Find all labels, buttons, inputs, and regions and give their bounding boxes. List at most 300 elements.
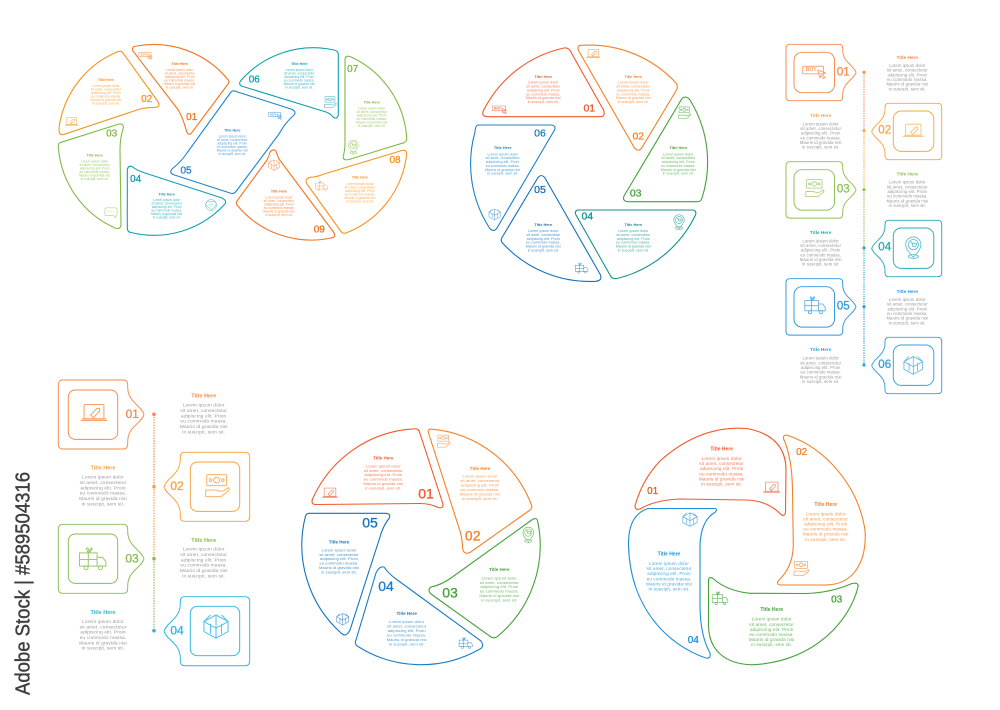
segment 06 [240, 48, 338, 118]
segment 03: 03 [442, 584, 458, 600]
step 06: Mauris id gravida nisi [800, 374, 842, 379]
segment 03: adipiscing elit. Proin [662, 160, 695, 164]
segment 01: Lorem ipsum dolor [702, 456, 742, 460]
segment 07: eu commodo massa. [356, 117, 387, 121]
step 01: eu commodo massa. [180, 418, 227, 424]
step 02: in suscipit, sem sit. [82, 501, 124, 507]
chart: nine-segment double circle [58, 45, 407, 240]
step 04: Mauris id gravida nisi [800, 256, 842, 261]
step 03: 03 [125, 551, 139, 565]
segment 04: 04 [130, 174, 142, 185]
segment 05: in suscipit, sem sit. [321, 569, 357, 574]
step 03: in suscipit, sem sit. [889, 203, 926, 208]
step 02: sit amet, consectetur [80, 480, 127, 486]
step 03: eu commodo massa. [180, 562, 227, 568]
segment 02: sit amet, consectetur [616, 85, 651, 89]
step 04: sit amet, consectetur [800, 242, 842, 247]
stock id caption: Adobe Stock | #589504316 [12, 472, 34, 695]
segment 01: BUY [141, 52, 147, 56]
segment 04: Mauris id gravida nisi [616, 245, 651, 249]
segment 03: eu commodo massa. [480, 588, 519, 593]
segment 02: 02 [632, 131, 644, 143]
segment 01: adipiscing elit. Proin [165, 75, 195, 79]
step 01: sit amet, consectetur [887, 67, 928, 72]
step 04: sit amet, consectetur [80, 624, 127, 630]
segment 02: adipiscing elit. Proin [91, 91, 121, 95]
segment 01: eu commodo massa. [164, 78, 195, 82]
step 06 [800, 337, 942, 394]
segment 09: eu commodo massa. [264, 206, 294, 210]
step 05: in suscipit, sem sit. [889, 320, 926, 325]
segment 06: 06 [534, 127, 546, 139]
timeline dotted spine [862, 71, 866, 367]
segment 01: sit amet, consectetur [526, 85, 561, 89]
segment 04: Title Here [159, 192, 175, 196]
step 04: adipiscing elit. Proin [801, 247, 841, 252]
segment 02: in suscipit, sem sit. [618, 100, 649, 104]
segment 06 [471, 125, 555, 230]
segment 07: Lorem ipsum dolor [358, 106, 385, 110]
segment 02: Mauris id gravida nisi [460, 491, 500, 496]
segment 03: in suscipit, sem sit. [751, 642, 792, 647]
segment 03: Title Here [760, 607, 783, 613]
step 02: sit amet, consectetur [800, 125, 842, 130]
step 01: Mauris id gravida nisi [886, 81, 928, 86]
segment 02: Title Here [98, 78, 114, 82]
segment 01 [312, 429, 443, 508]
step 03: adipiscing elit. Proin [181, 557, 227, 563]
segment 02 [778, 435, 865, 585]
segment 02: Title Here [470, 466, 491, 471]
segment 03: in suscipit, sem sit. [481, 597, 517, 602]
segment 03 [624, 97, 708, 202]
segment 02: sit amet, consectetur [91, 87, 121, 91]
segment 03 [58, 124, 123, 228]
segment 03: sit amet, consectetur [480, 579, 519, 584]
segment 05 [171, 91, 295, 194]
step 05: Mauris id gravida nisi [886, 315, 928, 320]
segment 02: Title Here [814, 502, 837, 508]
step 02: adipiscing elit. Proin [80, 485, 126, 491]
segment 02: in suscipit, sem sit. [805, 536, 846, 541]
segment 05: in suscipit, sem sit. [218, 152, 246, 156]
segment 05: 05 [180, 166, 192, 176]
segment 08: sit amet, consectetur [345, 185, 375, 189]
step 06: adipiscing elit. Proin [801, 365, 841, 370]
step 01: in suscipit, sem sit. [182, 429, 225, 435]
step 01: 01 [126, 407, 139, 421]
step 03: sit amet, consectetur [180, 552, 227, 558]
segment 03: in suscipit, sem sit. [81, 177, 109, 181]
chart: four-segment pinwheel circle [628, 428, 865, 665]
step 01: Lorem ipsum dolor [889, 62, 926, 68]
segment 05: 05 [534, 184, 546, 196]
segment 01: adipiscing elit. Proin [364, 472, 402, 477]
segment 04: in suscipit, sem sit. [153, 215, 181, 219]
segment 01: in suscipit, sem sit. [701, 481, 742, 486]
step 04: Mauris id gravida nisi [79, 640, 127, 646]
step 03: 03 [837, 183, 850, 195]
segment 09 [236, 150, 335, 240]
segment 02: Lorem ipsum dolor [806, 511, 846, 516]
segment 07 [343, 56, 407, 160]
segment 03: adipiscing elit. Proin [750, 626, 794, 631]
segment 06: sit amet, consectetur [284, 71, 315, 75]
segment 08: Lorem ipsum dolor [346, 182, 374, 186]
segment 04: Title Here [396, 611, 417, 616]
step 04: eu commodo massa. [80, 634, 126, 640]
step 01 [786, 44, 928, 101]
segment 05: Mauris id gravida nisi [319, 565, 359, 570]
segment 02: eu commodo massa. [616, 92, 650, 96]
segment 09: Title Here [271, 189, 287, 193]
step 05: adipiscing elit. Proin [888, 306, 928, 311]
segment 08 [306, 150, 407, 233]
segment 02: Lorem ipsum dolor [618, 81, 649, 85]
segment 01: 01 [186, 112, 198, 123]
segment 02: Mauris id gravida nisi [803, 531, 849, 536]
step 02: in suscipit, sem sit. [802, 144, 839, 149]
segment 03: Lorem ipsum dolor [752, 616, 792, 621]
segment 01: 01 [583, 103, 595, 115]
step 04 [800, 220, 942, 277]
segment 05: 05 [362, 514, 378, 530]
segment 03: 03 [630, 187, 642, 199]
segment 03: eu commodo massa. [79, 170, 110, 174]
segment 02: eu commodo massa. [91, 94, 121, 98]
segment 03: Lorem ipsum dolor [663, 152, 694, 156]
step 02: eu commodo massa. [800, 135, 841, 140]
segment 05: adipiscing elit. Proin [320, 556, 358, 561]
step 04: in suscipit, sem sit. [82, 645, 124, 651]
segment 03: Title Here [489, 567, 510, 572]
segment 01: Mauris id gravida nisi [526, 96, 561, 100]
segment 03: 03 [106, 128, 118, 140]
segment 02 [428, 429, 532, 553]
segment 05 [501, 176, 601, 281]
segment 02: adipiscing elit. Proin [461, 482, 499, 487]
step 02: 02 [878, 125, 891, 137]
segment 05: in suscipit, sem sit. [528, 248, 559, 252]
segment 02 [59, 51, 159, 135]
step 01: Lorem ipsum dolor [183, 402, 225, 408]
step 05: 05 [837, 300, 850, 312]
segment 04: Title Here [624, 222, 643, 227]
step 05: eu commodo massa. [887, 310, 928, 315]
segment 01 [132, 45, 229, 134]
segment 03: Lorem ipsum dolor [482, 575, 517, 580]
segment 04: in suscipit, sem sit. [649, 586, 689, 591]
chart: six-segment circle [471, 45, 708, 281]
step 05: Lorem ipsum dolor [889, 296, 926, 302]
chart: four-step vertical timeline [58, 380, 250, 666]
step 02: Mauris id gravida nisi [800, 139, 842, 144]
segment 03: Title Here [87, 153, 103, 157]
segment 01 [483, 48, 604, 117]
segment 06: Lorem ipsum dolor [487, 152, 519, 156]
segment 07: Mauris id gravida nisi [356, 120, 388, 124]
segment 05: BUY [270, 112, 277, 116]
segment 06: eu commodo massa. [284, 78, 315, 82]
segment 06: Title Here [291, 62, 307, 66]
step 02: Lorem ipsum dolor [802, 121, 839, 126]
step 04: Lorem ipsum dolor [82, 618, 124, 624]
step 06: 06 [878, 359, 891, 371]
step 03: Lorem ipsum dolor [889, 179, 926, 184]
segment 06: Lorem ipsum dolor [286, 68, 313, 72]
segment 01 [635, 428, 786, 515]
segment 02: sit amet, consectetur [460, 478, 500, 483]
segment 02: Mauris id gravida nisi [90, 98, 122, 102]
step 05: sit amet, consectetur [887, 301, 928, 306]
segment 09: Lorem ipsum dolor [265, 195, 293, 199]
segment 05: sit amet, consectetur [217, 138, 248, 142]
segment 06: Title Here [494, 145, 512, 150]
segment 01: Lorem ipsum dolor [366, 463, 401, 468]
segment 03: in suscipit, sem sit. [663, 172, 694, 176]
segment 02: adipiscing elit. Proin [804, 521, 848, 526]
segment 04: 04 [581, 211, 593, 223]
segment 04: Lorem ipsum dolor [649, 560, 689, 566]
segment 01: Title Here [534, 74, 553, 79]
step 01: BUY [806, 67, 817, 73]
segment 01: Mauris id gravida nisi [699, 476, 745, 481]
segment 03: Mauris id gravida nisi [661, 168, 696, 172]
segment 03: adipiscing elit. Proin [480, 584, 518, 589]
segment 03: sit amet, consectetur [661, 156, 696, 160]
segment 04: adipiscing elit. Proin [617, 237, 650, 241]
segment 02: Lorem ipsum dolor [92, 84, 120, 88]
segment 01: eu commodo massa. [364, 476, 403, 481]
segment 01: 01 [647, 486, 659, 497]
segment 04: sit amet, consectetur [151, 201, 182, 205]
chart: five-segment circle [302, 429, 540, 665]
segment 02: eu commodo massa. [803, 526, 848, 531]
segment 04: eu commodo massa. [616, 241, 650, 245]
segment 06: adipiscing elit. Proin [284, 75, 314, 79]
step 04: eu commodo massa. [800, 252, 841, 257]
segment 06: in suscipit, sem sit. [285, 85, 313, 89]
segment 04 [355, 567, 483, 665]
segment 04: sit amet, consectetur [387, 623, 427, 628]
segment 07: adipiscing elit. Proin [357, 113, 387, 117]
segment 05: Mauris id gravida nisi [526, 245, 561, 249]
step 02: Title Here [810, 113, 832, 118]
segment 03: sit amet, consectetur [749, 621, 794, 626]
segment 06: sit amet, consectetur [486, 156, 521, 160]
step 03: Mauris id gravida nisi [180, 568, 228, 574]
segment 03 [429, 519, 540, 638]
segment 04: eu commodo massa. [387, 632, 426, 637]
step 02: adipiscing elit. Proin [801, 130, 841, 135]
step 03: in suscipit, sem sit. [182, 573, 225, 579]
segment 05: eu commodo massa. [526, 241, 560, 245]
segment 04: in suscipit, sem sit. [618, 248, 649, 252]
segment 05: Title Here [329, 540, 350, 544]
segment 04: 04 [378, 578, 394, 594]
segment 04: adipiscing elit. Proin [388, 627, 426, 632]
segment 07: in suscipit, sem sit. [358, 124, 386, 128]
segment 05: Lorem ipsum dolor [322, 547, 357, 552]
step 02: eu commodo massa. [80, 490, 126, 496]
segment 07: Title Here [364, 100, 380, 104]
step 05 [786, 279, 928, 335]
segment 01: eu commodo massa. [526, 92, 560, 96]
segment 09: adipiscing elit. Proin [264, 202, 294, 206]
segment 09: Mauris id gravida nisi [263, 209, 295, 213]
step 01: adipiscing elit. Proin [888, 72, 928, 77]
step 01: in suscipit, sem sit. [889, 86, 926, 91]
segment 02 [578, 45, 677, 150]
segment 05: eu commodo massa. [217, 145, 248, 149]
segment 05 [302, 513, 390, 635]
step 04 [79, 597, 250, 666]
step 04: Lorem ipsum dolor [802, 238, 839, 243]
step 02: 02 [170, 479, 184, 493]
step 01: adipiscing elit. Proin [181, 413, 227, 419]
segment 02: sit amet, consectetur [803, 516, 848, 521]
segment 02: in suscipit, sem sit. [462, 496, 498, 501]
segment 07: 07 [347, 64, 359, 75]
segment 02: adipiscing elit. Proin [617, 88, 650, 92]
segment 01: Title Here [710, 446, 733, 452]
segment 02: 02 [141, 94, 153, 105]
step 03: adipiscing elit. Proin [888, 189, 928, 194]
segment 05: Lorem ipsum dolor [528, 229, 559, 233]
segment 01: adipiscing elit. Proin [700, 466, 744, 471]
segment 04: eu commodo massa. [151, 208, 182, 212]
segment 01: Title Here [172, 62, 188, 66]
segment 05: adipiscing elit. Proin [217, 142, 247, 146]
step 02: Lorem ipsum dolor [82, 474, 124, 480]
segment 04: Lorem ipsum dolor [618, 229, 649, 233]
segment 06: eu commodo massa. [486, 164, 520, 168]
step 04: 04 [878, 242, 892, 254]
step 03: Title Here [897, 172, 918, 176]
segment 01: eu commodo massa. [699, 471, 744, 476]
segment 06: in suscipit, sem sit. [487, 172, 518, 176]
step 02: Mauris id gravida nisi [79, 496, 127, 502]
segment 08: adipiscing elit. Proin [345, 189, 375, 193]
step 01: eu commodo massa. [887, 76, 928, 81]
segment 03: Title Here [669, 145, 688, 150]
segment 02: eu commodo massa. [460, 487, 500, 492]
segment 04: Lorem ipsum dolor [153, 198, 180, 202]
segment 04: adipiscing elit. Proin [647, 571, 691, 576]
step 05: Title Here [897, 289, 918, 294]
step 03: Title Here [191, 538, 216, 544]
segment 04 [575, 210, 696, 279]
segment 02: Mauris id gravida nisi [616, 96, 651, 100]
segment 04 [628, 508, 716, 658]
step 04: Title Here [91, 610, 115, 616]
segment 02: Lorem ipsum dolor [463, 473, 498, 478]
step 04: in suscipit, sem sit. [802, 261, 839, 266]
segment 01: Mauris id gravida nisi [363, 481, 403, 486]
segment 09: 09 [314, 224, 325, 236]
segment 02: Title Here [624, 74, 643, 79]
segment 03: eu commodo massa. [749, 632, 794, 637]
segment 03: 03 [831, 594, 843, 606]
segment 04: Title Here [658, 551, 681, 557]
step 03: Lorem ipsum dolor [183, 546, 225, 552]
segment 01: adipiscing elit. Proin [527, 88, 560, 92]
step 03: sit amet, consectetur [887, 184, 928, 189]
segment 04: Lorem ipsum dolor [389, 618, 425, 624]
segment 06: adipiscing elit. Proin [486, 160, 519, 164]
segment 04: 04 [688, 635, 699, 646]
segment 08: Mauris id gravida nisi [344, 196, 376, 200]
segment 08: Title Here [352, 176, 368, 180]
segment 01: sit amet, consectetur [699, 461, 744, 466]
segment 01: sit amet, consectetur [364, 467, 403, 472]
segment 01: Lorem ipsum dolor [528, 81, 559, 85]
segment 05: Lorem ipsum dolor [219, 135, 246, 139]
segment 06: 06 [249, 74, 260, 86]
segment 04: in suscipit, sem sit. [389, 641, 425, 646]
segment 02: in suscipit, sem sit. [92, 101, 120, 105]
segment 03: sit amet, consectetur [79, 163, 110, 167]
segment 04: adipiscing elit. Proin [152, 205, 182, 209]
segment 04: eu commodo massa. [647, 576, 691, 581]
segment 08: in suscipit, sem sit. [346, 199, 374, 203]
step 06: Lorem ipsum dolor [802, 355, 839, 360]
segment 01: 01 [418, 485, 434, 501]
step 01: Title Here [897, 55, 918, 60]
step 06: sit amet, consectetur [800, 360, 842, 365]
segment 04: sit amet, consectetur [647, 566, 692, 571]
segment 01: Title Here [373, 456, 394, 460]
timeline dotted spine [152, 412, 156, 632]
step 06: eu commodo massa. [800, 369, 841, 374]
segment 05: Title Here [224, 128, 240, 132]
segment 04: Mauris id gravida nisi [646, 581, 692, 586]
segment 04: Mauris id gravida nisi [151, 212, 183, 216]
chart: six-step vertical timeline [786, 44, 942, 394]
segment 05: eu commodo massa. [320, 560, 358, 565]
segment 01: sit amet, consectetur [164, 71, 195, 75]
segment 07: sit amet, consectetur [356, 110, 387, 114]
segment 08: eu commodo massa. [345, 192, 375, 196]
step 01 [58, 380, 228, 449]
segment 03: Mauris id gravida nisi [479, 593, 519, 598]
segment 05: Mauris id gravida nisi [217, 149, 248, 153]
segment 04: Mauris id gravida nisi [387, 636, 427, 641]
segment 01: Mauris id gravida nisi [164, 82, 196, 86]
step 03 [58, 524, 228, 593]
segment 02: 02 [465, 528, 481, 544]
step 01: Title Here [191, 394, 216, 400]
segment 03: adipiscing elit. Proin [80, 167, 110, 171]
segment 05: Title Here [534, 222, 553, 227]
segment 03: eu commodo massa. [661, 164, 695, 168]
step 04: Title Here [810, 230, 832, 235]
segment 01: in suscipit, sem sit. [365, 485, 401, 490]
segment 03 [708, 578, 858, 665]
segment 06: Mauris id gravida nisi [284, 82, 315, 86]
segment 06: Mauris id gravida nisi [485, 168, 520, 172]
step 06: Title Here [810, 347, 832, 352]
segment 03: Mauris id gravida nisi [79, 174, 111, 178]
segment 05: sit amet, consectetur [319, 551, 359, 556]
step 01: Mauris id gravida nisi [180, 424, 228, 430]
step 02 [800, 103, 942, 160]
segment 04 [127, 166, 226, 235]
segment 01: BUY [494, 106, 502, 110]
segment 03: Mauris id gravida nisi [749, 637, 795, 642]
segment 09: in suscipit, sem sit. [265, 213, 293, 217]
step 03: eu commodo massa. [887, 193, 928, 198]
